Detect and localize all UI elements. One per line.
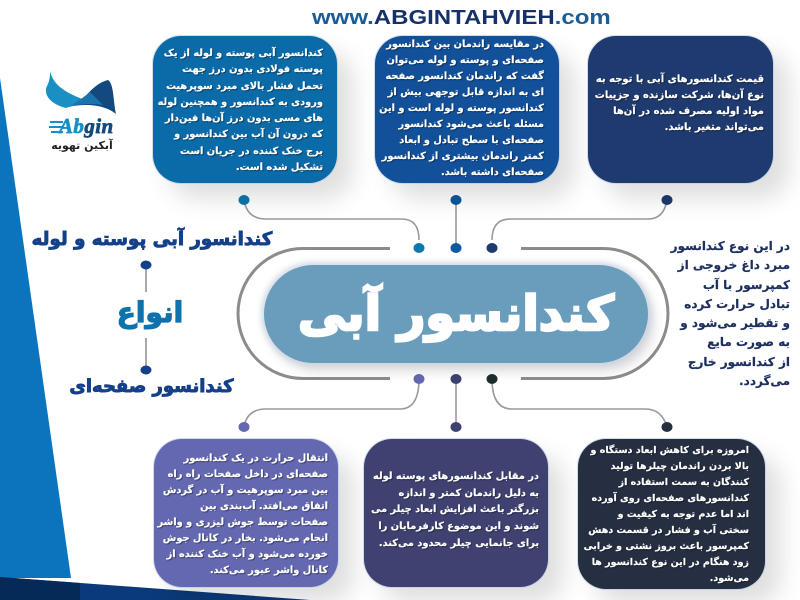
text: efficiency comparison: در مقایسه راندمان بین کندانسور <box>386 39 544 50</box>
panel: plate heat transfer <box>154 439 338 587</box>
text: shell and tube description: تشکیل شده است. <box>236 162 323 173</box>
text: efficiency comparison: صفحه‌ای داشته باشد. <box>441 167 544 178</box>
text: price note: نوع آن‌ها، شرکت سازنده و جزییات <box>595 90 764 101</box>
side description: از کندانسور خارج <box>688 355 790 369</box>
panel: shell and tube drawback <box>364 439 548 587</box>
side description: مبرد داغ خروجی از <box>678 258 790 272</box>
text: shell and tube description: های مسی بدون درز آن‌ها فین‌دار <box>165 113 323 124</box>
heading: types: انواع <box>117 296 183 329</box>
text: efficiency comparison: کمتر راندمان بیشتری از کندانسور <box>382 151 544 162</box>
text: shell and tube drawback: به دلیل راندمان کمتر و اندازه <box>398 488 539 499</box>
text: plate drawback: کندانسورهای صفحه‌ای روی آورده <box>592 493 749 504</box>
side description <box>670 239 790 388</box>
logo wordmark: Abgin <box>59 114 114 138</box>
text: plate drawback: سختی آب و فشار در قسمت دهش <box>588 525 749 536</box>
text: plate heat transfer: خورده می‌شود و آب خنک کننده از <box>167 549 328 560</box>
text: plate heat transfer: صفحه‌ای در داخل صفحات راه راه <box>168 469 328 480</box>
website url: www.ABGINTAHVIEH.com <box>312 7 611 29</box>
side description: تبادل حرارت کرده <box>684 297 790 311</box>
text: price note: قیمت کندانسورهای آبی با توجه به <box>596 74 764 85</box>
text: plate drawback: کمپرسور باعث بروز نشتی و خرابی <box>584 541 749 552</box>
panel: shell and tube description <box>153 36 337 183</box>
text: efficiency comparison: گفت که راندمان کندانسور صفحه <box>385 71 544 82</box>
text: plate drawback: اند اما عدم توجه به کیفیت و <box>618 509 749 520</box>
panel: plate drawback <box>578 439 765 589</box>
side description: به صورت مایع <box>707 335 790 349</box>
text: price note: می‌تواند متغیر باشد. <box>665 122 764 133</box>
icon: logo flame streaks <box>49 121 63 133</box>
text: plate drawback: کنندگان به سمت استفاده از <box>619 477 749 488</box>
logo <box>46 71 116 152</box>
side description: کمپرسور با آب <box>703 278 790 292</box>
icon: logo wave <box>46 71 116 114</box>
text: plate drawback: امروزه برای کاهش ابعاد دستگاه و <box>591 445 749 456</box>
text: efficiency comparison: ای به اندازه قابل توجهی بیش از <box>388 87 544 98</box>
text: price note <box>595 72 764 134</box>
text: shell and tube description: کندانسور آبی پوسته و لوله از یک <box>164 48 323 59</box>
text: shell and tube description: برج خنک کننده در جریان است <box>180 146 323 157</box>
text: efficiency comparison: مسئله باعث می‌شود کندانسور <box>398 119 544 130</box>
text: shell and tube drawback <box>371 471 540 550</box>
text: plate heat transfer: انتقال حرارت در یک کندانسور <box>184 453 328 464</box>
text: plate heat transfer: صفحات توسط جوش لیزری و واشر <box>158 517 328 528</box>
text: shell and tube drawback: شوند و این موضوع کارفرمایان را <box>378 521 539 532</box>
text: plate drawback: بالا بردن راندمان چیلرها تولید <box>611 461 749 472</box>
text: plate heat transfer: بین مبرد سوپرهیت و آب در گردش <box>163 485 328 496</box>
panel: efficiency comparison <box>375 36 559 183</box>
text: plate heat transfer <box>157 453 330 577</box>
heading: plate condenser: کندانسور صفحه‌ای <box>69 376 234 397</box>
text: shell and tube description: تحمل فشار بالای مبرد سوپرهیت <box>166 81 323 92</box>
side description: در این نوع کندانسور <box>671 239 790 253</box>
central title text: کندانسور آبی <box>298 286 614 342</box>
text: plate heat transfer: انجام می‌شود. بخار در کانال جوش <box>163 533 328 544</box>
text: plate heat transfer: اتفاق می‌افتد. آب‌بندی بین <box>200 501 328 512</box>
side description: می‌گردد. <box>739 374 790 388</box>
text: shell and tube drawback: بزرگتر باعث افزایش ابعاد چیلر می <box>371 504 539 515</box>
text: shell and tube description: پوسته فولادی بدون درز جهت <box>182 64 323 75</box>
text: plate drawback <box>584 444 750 584</box>
side description: و تقطیر می‌شود و <box>680 316 790 330</box>
text: plate drawback: زود هنگام در این نوع کندانسور ها <box>592 557 749 568</box>
text: price note: مواد اولیه مصرف شده در آن‌ها <box>613 106 764 117</box>
text: plate heat transfer: کانال واشر عبور می‌کند. <box>210 565 328 576</box>
panel: price note <box>588 36 773 183</box>
text: efficiency comparison: صفحه‌ای با سطح تبادل و ابعاد <box>399 135 544 146</box>
heading: shell and tube condenser: کندانسور آبی پوسته و لوله <box>32 229 272 250</box>
text: shell and tube description: ورودی به کندانسور و همچنین لوله <box>158 97 323 108</box>
text: shell and tube description: که درون آن آب بین کندانسور و <box>174 129 323 140</box>
text: shell and tube description <box>158 46 324 173</box>
text: efficiency comparison: کندانسور پوسته و لوله است و این <box>379 103 544 114</box>
text: shell and tube drawback: برای جانمایی چیلر محدود می‌کند. <box>379 538 539 549</box>
text: efficiency comparison: صفحه‌ای و پوسته و لوله می‌توان <box>387 55 544 66</box>
text: plate drawback: می‌شود. <box>710 573 749 584</box>
text: efficiency comparison <box>379 39 546 178</box>
logo caption: آبکین تهویه <box>51 139 113 152</box>
text: shell and tube drawback: در مقابل کندانسورهای پوسته لوله <box>373 471 539 482</box>
central title pill <box>264 265 648 363</box>
